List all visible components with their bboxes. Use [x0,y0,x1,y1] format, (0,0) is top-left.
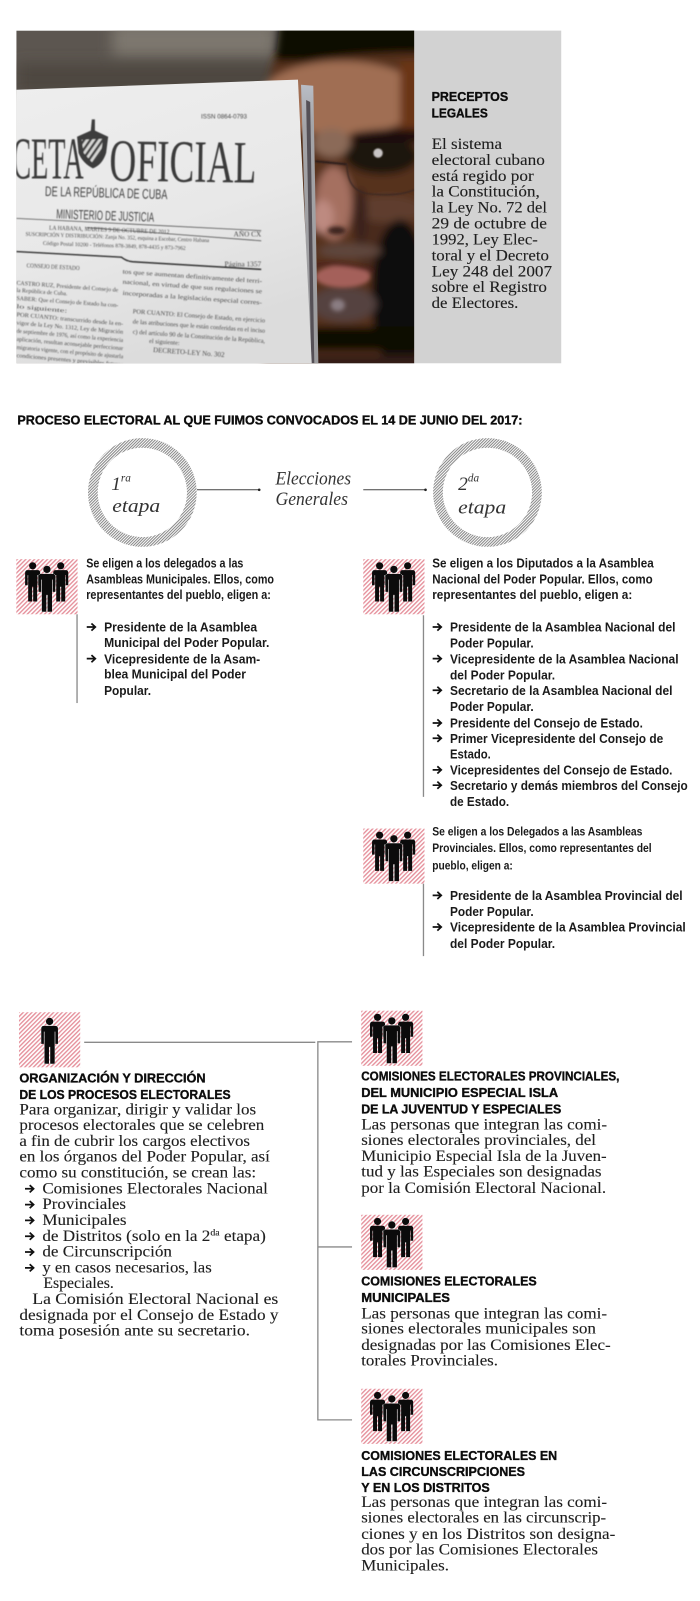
block heading [361,1448,557,1495]
stage 1 circle: etapa [112,496,160,517]
block body text: torales Provinciales. [361,1352,498,1369]
block body text: Las personas que integran las comi- [361,1117,607,1134]
photo: newspaper page: POR CUANTO: transcurrido desde la en- [16,312,123,328]
list of elected offices: de Estado. [450,794,509,809]
block body text: como su constitución, se crean las: [19,1165,256,1182]
block: stage 2 provincial delegates [363,825,686,956]
arrow: stage 1 to general elections [197,488,261,491]
icon: three people [361,1011,422,1066]
block body text [361,1494,615,1574]
photo: newspaper page: DECRETO-LEY No. 302 [153,346,225,359]
photo: newspaper page: lo siguiente: [16,304,68,315]
block body text: Municipales. [361,1557,449,1574]
label: Elecciones Generales: Generales [276,489,348,510]
block body text: a fin de cubrir los cargos electivos [19,1133,250,1150]
block body text: etapa) [220,1228,266,1245]
block body text: ciones y en los Distritos son designa- [361,1526,615,1543]
stage 1 circle [93,443,192,542]
block intro text [86,555,274,602]
block body text: por la Comisión Electoral Nacional. [361,1180,606,1197]
panel heading [432,89,508,120]
photo: newspaper page: tos que se aumentan definitivamente del terri- [122,268,262,285]
block heading: DE LA JUVENTUD Y ESPECIALES [361,1101,561,1116]
photo: newspaper page: DE LA REPÚBLICA DE CUBA [45,183,168,202]
block heading [361,1069,619,1116]
list of elected offices: Presidente de la Asamblea Nacional del [450,620,676,635]
block heading: DEL MUNICIPIO ESPECIAL ISLA [361,1085,559,1100]
block body text [19,1101,279,1340]
icon: three people [363,829,424,884]
block body text: en los órganos del Poder Popular, así [19,1149,271,1166]
block body text: designada por el Consejo de Estado y [19,1307,279,1324]
panel heading: PRECEPTOS [432,89,508,104]
list of elected offices: Municipal del Poder Popular. [104,635,269,650]
block intro text: Se eligen a los Diputados a la Asamblea [432,555,654,570]
title: PROCESO ELECTORAL AL QUE FUIMOS CONVOCADOS EL 14 DE JUNIO DEL 2017: [17,412,522,427]
photo: newspaper page: condiciones presentes y previsibles futuras [16,352,124,369]
block heading [19,1071,231,1102]
block intro text: Se eligen a los Delegados a las Asambleas [432,825,643,839]
panel body text: de Electores. [432,295,518,312]
photo: newspaper page: de septiembre de 1976, así como la experiencia [16,329,124,344]
list of elected offices: Vicepresidente de la Asamblea Provincial [450,920,686,935]
block intro text [432,825,652,872]
list of elected offices: Primer Vicepresidente del Consejo de [450,731,663,746]
photo: newspaper page: incorporadas a la legislación especial corres- [122,290,262,307]
photo: newspaper page: vigor de la Ley No. 1312, Ley de Migración [16,321,123,336]
photo: newspaper page: ISSN 0864-0793 [201,113,247,120]
block intro text: Nacional del Poder Popular. Ellos, como [432,572,653,587]
block body text: siones electorales municipales son [361,1321,596,1338]
photo: newspaper page: nacional, en virtud de que sus regulaciones se [122,279,262,295]
icon: one person [19,1012,80,1067]
block heading: ORGANIZACIÓN Y DIRECCIÓN [19,1071,206,1086]
photo: newspaper page: OFICIAL [109,128,257,197]
panel body text: toral y el Decreto [432,247,549,264]
block body text [361,1305,611,1369]
block body text: Las personas que integran las comi- [361,1305,607,1322]
stage 2 circle: da [468,473,479,485]
icon: three people [361,1215,422,1270]
block heading: COMISIONES ELECTORALES EN [361,1448,557,1463]
list of elected offices: Presidente de la Asamblea Provincial del [450,888,683,903]
block body text: La Comisión Electoral Nacional es [32,1291,278,1308]
block body text: Municipales [42,1212,127,1229]
block intro text: Provinciales. Ellos, como representantes del [432,841,652,855]
stage 2 circle: 2 [458,474,468,495]
panel body text: la Constitución, [432,184,540,201]
stage 1 circle: ra [121,473,131,485]
list of elected offices: Presidente del Consejo de Estado. [450,716,643,731]
photo: newspaper page: de las atribuciones que le están conferidas en el inciso [133,318,265,335]
list of elected offices [433,620,688,809]
list of elected offices: Poder Popular. [450,904,534,919]
block heading [361,1274,537,1305]
panel body text: 1992, Ley Elec- [432,231,538,248]
list of elected offices [87,620,269,698]
icon: three people [16,559,78,614]
photo: newspaper page: SABER: Que el Consejo de Estado ha con- [16,296,118,309]
photo: page edges [301,85,318,363]
photo: newspaper page: LA HABANA, MARTES 9 DE OCTUBRE DE 2012 [49,226,169,236]
list of elected offices [433,888,686,951]
block body text: procesos electorales que se celebren [19,1117,264,1134]
photo: Gaceta Oficial newspaper held by a man [16,30,414,364]
stage 2 circle [438,443,537,542]
photo: newspaper page: migratoria vigente, con el propósito de ajustarla [16,345,124,360]
photo: newspaper page: aplicación, resultan aconsejable perfeccionar [16,336,124,352]
block intro text: pueblo, eligen a: [432,858,513,872]
block intro text: representantes del pueblo, eligen a: [432,587,632,602]
block body text: tud y las Especiales son designadas [361,1164,602,1181]
connector lines: national commission to lower commissions [84,1042,352,1420]
icon: three people [361,1389,422,1444]
block body text: designadas por las Comisiones Elec- [361,1337,611,1354]
block body text [361,1117,607,1197]
list of elected offices: del Poder Popular. [450,668,555,683]
block: municipal commissions [361,1215,611,1369]
block: stage 1 municipal delegates [16,555,274,703]
panel body text [432,136,552,312]
panel heading: LEGALES [432,105,488,120]
list of elected offices: Secretario de la Asamblea Nacional del [450,683,672,698]
panel body text: El sistema [432,136,502,153]
panel body text: electoral cubano [432,152,545,169]
label: Elecciones Generales [275,469,351,510]
icon: three people [363,559,424,614]
stage 2 circle: etapa [458,497,506,518]
block body text: y en casos necesarios, las [42,1259,212,1276]
arrow: general elections to stage 2 [363,488,427,491]
photo: newspaper page: c) del artículo 90 de la Constitución de la República, [133,329,266,345]
block intro text: representantes del pueblo, eligen a: [86,587,271,602]
block: constituency and district commissions [361,1389,615,1574]
list of elected offices: Vicepresidente de la Asamblea Nacional [450,651,679,666]
block heading: MUNICIPALES [361,1290,450,1305]
photo: newspaper page: CONSEJO DE ESTADO [26,263,80,272]
panel body text: la Ley No. 72 del [432,200,548,217]
block body text: Provinciales [42,1196,126,1213]
block body text: Para organizar, dirigir y validar los [19,1101,256,1118]
panel body text: Ley 248 del 2007 [432,263,552,280]
block: provincial commissions [361,1011,619,1197]
block heading: DE LOS PROCESOS ELECTORALES [19,1087,231,1102]
list of elected offices: Vicepresidente de la Asam- [104,651,260,666]
list of elected offices: Estado. [450,747,491,762]
block body text: Municipio Especial Isla de la Juven- [361,1148,607,1165]
block heading: LAS CIRCUNSCRIPCIONES [361,1464,525,1479]
panel: preceptos legales [414,31,561,363]
panel body text: 29 de octubre de [432,216,547,233]
photo: newspaper page: Página 1357 [224,261,262,268]
block body text: de Circunscripción [42,1244,172,1261]
block body text: siones electorales provinciales, del [361,1132,597,1149]
block body text: Comisiones Electorales Nacional [42,1180,268,1197]
block: stage 2 national deputies [363,555,688,809]
label: Elecciones Generales: Elecciones [275,469,351,490]
photo: newspaper page: MINISTERIO DE JUSTICIA [56,206,155,225]
panel body text: sobre el Registro [432,279,547,296]
panel body text: está regido por [432,168,534,185]
block: organization and direction of electoral processes [19,1012,279,1340]
photo: newspaper page: Código Postal 10200 - Teléfonos 878-3849, 878-4435 y 873-7962 [43,240,186,252]
block intro text [432,555,654,602]
photo: newspaper page: SUSCRIPCIÓN Y DISTRIBUCIÓN: Zanja No. 352, esquina a Escobar, Centro Habana [25,230,210,244]
list of elected offices: Vicepresidentes del Consejo de Estado. [450,762,672,777]
list of elected offices: blea Municipal del Poder [104,667,246,682]
block body text: toma posesión ante su secretario. [19,1323,250,1340]
block heading: COMISIONES ELECTORALES PROVINCIALES, [361,1069,619,1084]
photo: newspaper page: CASTRO RUZ, Presidente del Consejo de [16,281,119,294]
block body text: de Distritos (solo en la 2 [42,1228,198,1245]
block intro text: Asambleas Municipales. Ellos, como [86,572,274,587]
photo: newspaper page: el siguiente: [149,338,180,347]
block body text: Las personas que integran las comi- [361,1494,607,1511]
block body text: da [210,1228,220,1238]
list of elected offices: Poder Popular. [450,699,534,714]
photo: newspaper page: POR CUANTO: El Consejo de Estado, en ejercicio [133,308,265,325]
block body text: Especiales. [43,1275,114,1292]
block body text: dos por las Comisiones Electorales [361,1542,598,1559]
block heading: Y EN LOS DISTRITOS [361,1480,490,1495]
list of elected offices: Poder Popular. [450,635,534,650]
list of elected offices: Presidente de la Asamblea [104,620,258,635]
list of elected offices: Popular. [104,683,151,698]
photo: face [258,30,414,364]
photo: newspaper page: la República de Cuba. [16,288,68,297]
stage 1 circle: 1 [111,474,121,495]
block intro text: Se eligen a los delegados a las [86,555,243,570]
block heading: COMISIONES ELECTORALES [361,1274,537,1289]
list of elected offices: del Poder Popular. [450,936,555,951]
photo: newspaper page: AÑO CX [234,231,262,239]
block body text: siones electorales en las circunscrip- [361,1509,606,1526]
photo: newspaper page [0,80,312,369]
